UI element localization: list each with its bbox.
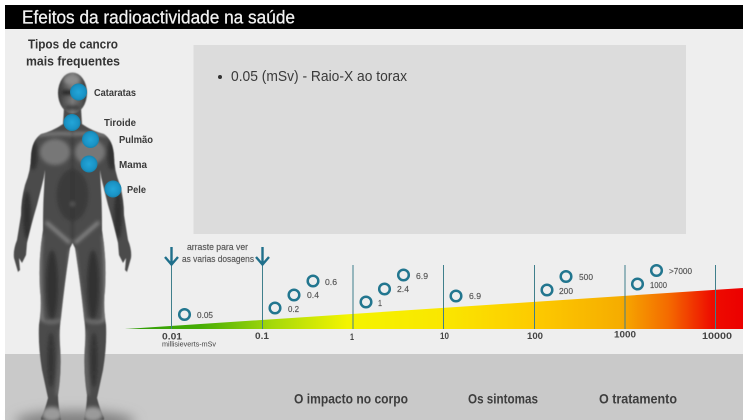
bottom tabs: O impacto no corpo: [294, 390, 408, 406]
marker: tiroide: [64, 114, 80, 131]
dose labels: [197, 266, 692, 320]
axis labels: 1000: [614, 330, 636, 340]
dose labels: 0.4: [307, 290, 319, 300]
dose labels: 0.6: [325, 277, 337, 287]
axis labels: 10: [440, 331, 449, 342]
abdomen: [56, 169, 88, 221]
dose labels: 2.4: [397, 284, 409, 294]
dose labels: >7000: [669, 266, 692, 276]
drag hint: [182, 242, 254, 264]
dose labels: 0.05: [197, 310, 213, 320]
chart: tick lines: [172, 248, 716, 329]
panel: info box: 0.05 (mSv) - Raio-X ao torax: [231, 68, 407, 85]
rim light on thighs: [40, 235, 106, 320]
heading: cancer types: Tipos de cancro: [28, 36, 118, 52]
axis labels: 10000: [702, 331, 732, 342]
body labels: Pele: [127, 184, 146, 196]
panel: background: [5, 29, 743, 354]
arrow: right slider: [256, 247, 269, 264]
panel: info box: [194, 45, 686, 234]
bottom tabs: [294, 390, 677, 406]
feet: [42, 407, 62, 420]
marker: cataratas: [70, 84, 87, 100]
marker: pulmao: [82, 131, 99, 148]
dark leg cores: [46, 250, 58, 320]
arm shading: [23, 191, 31, 239]
axis labels: 0.01: [162, 332, 183, 342]
dose labels: 0.2: [288, 304, 299, 314]
heading: cancer types: mais frequentes: [26, 54, 120, 68]
arrow: left slider: [165, 247, 178, 264]
human body figure: [10, 72, 135, 420]
axis labels: 100: [527, 331, 543, 342]
axis unit: millisieverts-mSv: [162, 342, 217, 348]
body labels: Cataratas: [94, 87, 136, 99]
marker: mama: [80, 156, 98, 172]
drag hint: arraste para ver: [187, 242, 248, 252]
marker: pele: [104, 180, 122, 198]
body labels: Tiroide: [104, 117, 136, 129]
chart: dose wedge: [125, 288, 743, 329]
dose labels: 1: [378, 298, 382, 308]
axis labels: [162, 330, 732, 343]
drag hint: as varias dosagens: [182, 254, 254, 264]
chest and shoulder light: [40, 139, 70, 165]
body labels: Mama: [119, 159, 147, 171]
dose labels: 1000: [650, 280, 667, 290]
body labels: [94, 87, 153, 196]
floor shadow: [15, 411, 135, 420]
heading: cancer types: [26, 36, 120, 68]
panel: bottom band: [5, 354, 743, 420]
dose labels: 6.9: [469, 291, 481, 301]
dose labels: 500: [579, 272, 593, 282]
axis labels: 1: [350, 332, 355, 343]
dose markers: [179, 265, 662, 320]
dose labels: 6.9: [416, 271, 428, 281]
bottom tabs: Os sintomas: [468, 390, 538, 406]
title bar: Efeitos da radioactividade na saúde: [22, 8, 295, 28]
dose labels: 200: [559, 286, 573, 296]
bottom tabs: O tratamento: [599, 390, 677, 406]
axis labels: 0.1: [255, 331, 270, 342]
title bar: [5, 5, 743, 29]
head: [58, 72, 87, 114]
body labels: Pulmão: [119, 134, 153, 146]
